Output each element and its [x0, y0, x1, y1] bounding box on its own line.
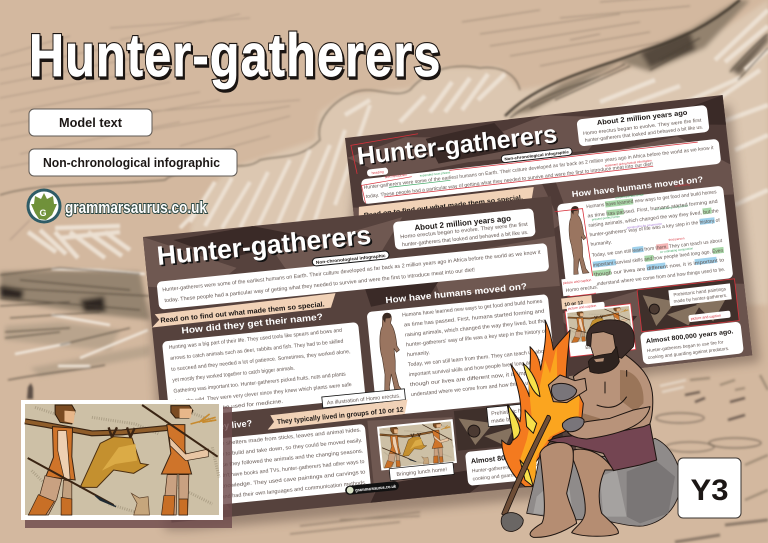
fire	[502, 320, 587, 487]
icon: grammarsaurus logo	[26, 188, 62, 224]
box: about 2 million years ago: Homo erectus began to evolve. They were the first	[400, 222, 529, 240]
banner: read on	[357, 187, 536, 223]
box: almost 800,000 years ago	[465, 442, 566, 486]
box: almost 800,000 years ago: cooking and guarding against predators.	[648, 346, 730, 360]
pill: non-chronological infographic	[501, 147, 572, 163]
banner: read on: Read on to find out what made them so special.	[364, 194, 524, 219]
picture: back sheet hand paintings: picture and caption	[690, 314, 721, 321]
panel: how did they get their name: Hunting was a big part of their life. They used tools like spears and bows and	[169, 328, 342, 351]
pill: non-chronological infographic: Non-chronological infographic	[316, 253, 386, 265]
caption: homo erectus	[322, 389, 405, 408]
head	[587, 320, 634, 373]
text: body: Humans have learned new ways to get food and build homes	[402, 299, 543, 319]
heading: how have humans moved on: How have humans moved on?	[571, 174, 704, 199]
label: model text	[29, 109, 152, 136]
box: almost 800,000 years ago: Hunter-gatherers began to use fire for	[647, 339, 724, 353]
picture shadow	[25, 407, 232, 528]
text: body: though our lives are different now, it is important to	[410, 368, 551, 388]
text: body	[402, 299, 552, 398]
text: back sheet body	[586, 189, 726, 288]
arm and torso	[573, 353, 653, 437]
club with stone head	[501, 415, 551, 531]
legs	[530, 442, 618, 537]
arms with rocks	[548, 375, 650, 439]
text: back sheet body: humanity.	[590, 239, 612, 248]
pill: grammarsaurus logo: grammarsaurus.co.uk	[355, 484, 397, 493]
box: almost 800,000 years ago: Hunter-gatherers began to use fire for	[472, 460, 556, 474]
banner: read on: Read on to find out what made them so special.	[160, 301, 325, 325]
caption: homo erectus: An illustration of Homo erectus.	[327, 393, 401, 407]
banner: groups of 10 or 12: 10 or 12	[564, 300, 584, 308]
label: non-chronological infographic	[29, 149, 237, 176]
picture: homo erectus figure	[554, 205, 595, 297]
box: introduction	[361, 137, 721, 204]
banner: groups of 10 or 12: They typically lived in groups of 10 or 12	[277, 406, 404, 426]
label: non-chronological infographic: Non-chronological infographic	[43, 156, 220, 170]
panel: front infographic sheet	[143, 196, 579, 523]
heading: back sheet title: Hunter-gatherers	[356, 120, 558, 171]
panel: how have humans moved on	[367, 294, 558, 417]
highlights and language annotations: present perfect tense	[615, 193, 644, 200]
panel: where did they live: This was because they followed the animals and the changing seasons.	[182, 448, 364, 472]
panel: back infographic sheet	[345, 95, 752, 398]
highlights and language annotations: third person	[668, 236, 685, 242]
box: almost 800,000 years ago	[640, 321, 744, 365]
panel: where did they live	[172, 424, 371, 509]
pill: non-chronological infographic: Non-chronological infographic	[504, 149, 570, 161]
cream scribbles	[28, 226, 130, 258]
highlights and language annotations: co-ordinating conjunction	[660, 246, 694, 254]
picture: hunters carrying a deer	[21, 400, 223, 520]
box: about 2 million years ago: About 2 million years ago	[414, 214, 512, 232]
ground squiggles	[656, 413, 704, 423]
pill: non-chronological infographic	[312, 251, 389, 266]
heading: how did they get their name: How did they get their name?	[181, 312, 323, 336]
panel: how did they get their name	[162, 322, 366, 418]
banner: groups of 10 or 12	[266, 400, 409, 430]
panel: where did they live: Although they didn't have books and TVs, hunter-gatherers had other ways to	[183, 459, 365, 483]
banner: groups of 10 or 12	[559, 295, 593, 310]
panel: where did they live: communicate, and had their own languages and communication methods.	[185, 480, 367, 504]
text: back sheet body: Today, we can still learn from them. They can teach us about	[592, 238, 723, 259]
box: introduction: Hunter-gatherers were some of the earliest humans on Earth. Their culture developed as far back as 2 million years ago in Africa before the world as we know it	[162, 250, 541, 293]
main title: Hunter-gatherers	[29, 22, 442, 89]
box: about 2 million years ago: Homo erectus began to evolve. They were the first	[583, 117, 702, 137]
label: model text: Model text	[59, 116, 123, 130]
picture: hand paintings	[454, 400, 563, 451]
picture: back sheet hand paintings: Prehistoric hand paintings	[673, 286, 727, 297]
main title: Hunter-gatherers	[29, 22, 442, 89]
text: body: humanity.	[407, 350, 430, 358]
panel: how did they get their name: Gathering was important too. Hunter-gatherers picked fruits, nuts and plants	[173, 372, 346, 395]
shadows beneath the sheets	[150, 105, 760, 530]
heading: front sheet title: Hunter-gatherers	[157, 221, 374, 272]
box: introduction: brief introduction	[384, 173, 407, 179]
highlights and language annotations: present perfect tense	[592, 214, 620, 222]
panel: how did they get their name: yet mostly they worked together to catch bigger animals.	[172, 366, 295, 384]
picture: back sheet hand paintings	[637, 279, 739, 332]
text: body: understand where we come from and how things used to be.	[411, 378, 552, 398]
box: about 2 million years ago	[393, 208, 536, 250]
text: back sheet body: raising animals, which changed the way they lived, but the	[588, 208, 719, 229]
box: introduction: Hunter-gatherers were some of the earliest humans on Earth. Their culture developed as far back as 2 million years ago in Africa before the world as we know it	[363, 145, 714, 191]
loincloth	[548, 424, 657, 471]
text: body: raising animals, which changed the way they lived, but the	[405, 318, 546, 338]
picture: back sheet bringing lunch home: picture and caption	[568, 304, 597, 311]
heading: back sheet title: Hunter-gatherers	[357, 121, 560, 172]
highlights and language annotations: co-ordinating conjunction	[655, 204, 689, 211]
badge: Y3: Y3	[690, 474, 728, 507]
picture: homo erectus figure	[377, 312, 403, 393]
box: almost 800,000 years ago: cooking and guarding against predators.	[472, 468, 562, 482]
box: introduction: expanded noun phrase	[420, 170, 451, 178]
illustration: caveman by a fire	[501, 320, 681, 537]
main title: Hunter-gatherers	[30, 25, 443, 92]
annotation: heading box	[350, 134, 422, 178]
panel: how did they get their name: to eat and could be used for medicine.	[175, 399, 283, 416]
picture: back sheet bringing lunch home: Bringing	[585, 343, 604, 351]
text: back sheet body: understand where we come from and how things used to be.	[595, 267, 726, 288]
website address: grammarsaurus.co.uk	[65, 198, 207, 217]
text: body: hunter-gatherers' way of life was a key step in the history of	[406, 328, 547, 348]
picture: back sheet bringing lunch home	[564, 299, 636, 357]
panel: where did they live: They built simple shelters made from sticks, leaves and animal hides.	[180, 427, 362, 451]
caption: homo erectus: Homo erectus.	[565, 284, 598, 294]
icon: grammarsaurus logo: G	[39, 208, 47, 218]
picture: hand paintings: Prehistoric hand paintings	[491, 405, 554, 417]
caption: homo erectus: picture and caption	[563, 278, 592, 285]
box: about 2 million years ago: hunter-gatherers that looked and behaved a bit like us.	[585, 124, 703, 144]
text: body: Today, we can still learn from them. They can teach us about	[408, 348, 549, 368]
panel: how did they get their name: from the wild. They were very clever since they knew which plants were safe	[174, 382, 352, 406]
heading: how have humans moved on: How have humans moved on?	[385, 281, 527, 305]
box: introduction: today. These people had a particular way of getting what they needed to survive and were the first to introduce meat into our diet!	[365, 161, 653, 200]
text: back sheet body: hunter-gatherers' way of life was a key step in the history of	[589, 218, 721, 238]
text: back sheet body: important survival skills and how people lived long ago. Even	[593, 248, 724, 269]
panel: where did they live: These were easy to build and take down, so they could be moved easily.	[181, 438, 363, 462]
rock seat	[527, 438, 681, 526]
heading: front sheet title: Hunter-gatherers	[155, 220, 372, 271]
highlights and language annotations	[584, 179, 725, 277]
text: body: as time has passed. First, humans started forming and	[404, 309, 545, 328]
picture: hand paintings: made by hunter-gatherers.	[491, 413, 555, 425]
text: body: important survival skills and how people lived long ago. Even	[409, 358, 550, 378]
picture: back sheet hand paintings: made by hunter-gatherers.	[673, 293, 728, 304]
picture: bringing lunch home	[377, 419, 458, 481]
ink outlines	[0, 66, 520, 195]
text: back sheet body: as time has passed. First, humans started forming and	[587, 199, 718, 220]
heading: where did they live: Where did they live?	[164, 418, 253, 437]
caption: homo erectus	[561, 275, 599, 296]
panel: where did they live: pass on their knowledge. They used cave paintings and carvings to	[184, 469, 366, 494]
pill: grammarsaurus logo	[345, 481, 399, 495]
box: introduction: today. These people had a particular way of getting what they needed to survive and were the first to introduce meat into our diet!	[164, 267, 476, 304]
annotation: heading box: heading	[371, 170, 384, 175]
box: introduction: statement giving factual information	[605, 158, 652, 168]
highlights and language annotations: apostrophe for possession	[627, 222, 662, 230]
box: about 2 million years ago: About 2 million years ago	[597, 110, 688, 127]
highlights and language annotations: subheading	[674, 182, 691, 188]
panel: how did they get their name: arrows to catch animals such as deer, rabbits and fish. They had to be skilled	[170, 339, 344, 362]
box: almost 800,000 years ago: Almost 800,000 years ago.	[471, 450, 561, 466]
text: back sheet body: though our lives are different now, it is important to	[594, 257, 725, 278]
badge: Y3	[678, 458, 741, 518]
panel: how did they get their name: to succeed and they needed a lot of patience. Sometimes, they worked alone,	[171, 349, 351, 373]
box: introduction	[157, 243, 549, 310]
box: about 2 million years ago: hunter-gatherers that looked and behaved a bit like us.	[402, 230, 529, 248]
text: back sheet body: Humans have learned new ways to get food and build homes	[586, 189, 717, 210]
picture: bringing lunch home: Bringing lunch home!	[396, 467, 448, 478]
box: about 2 million years ago	[576, 105, 710, 147]
box: almost 800,000 years ago: Almost 800,000 years ago.	[646, 328, 734, 345]
panel: how have humans moved on	[552, 179, 733, 297]
banner: read on	[150, 293, 337, 328]
